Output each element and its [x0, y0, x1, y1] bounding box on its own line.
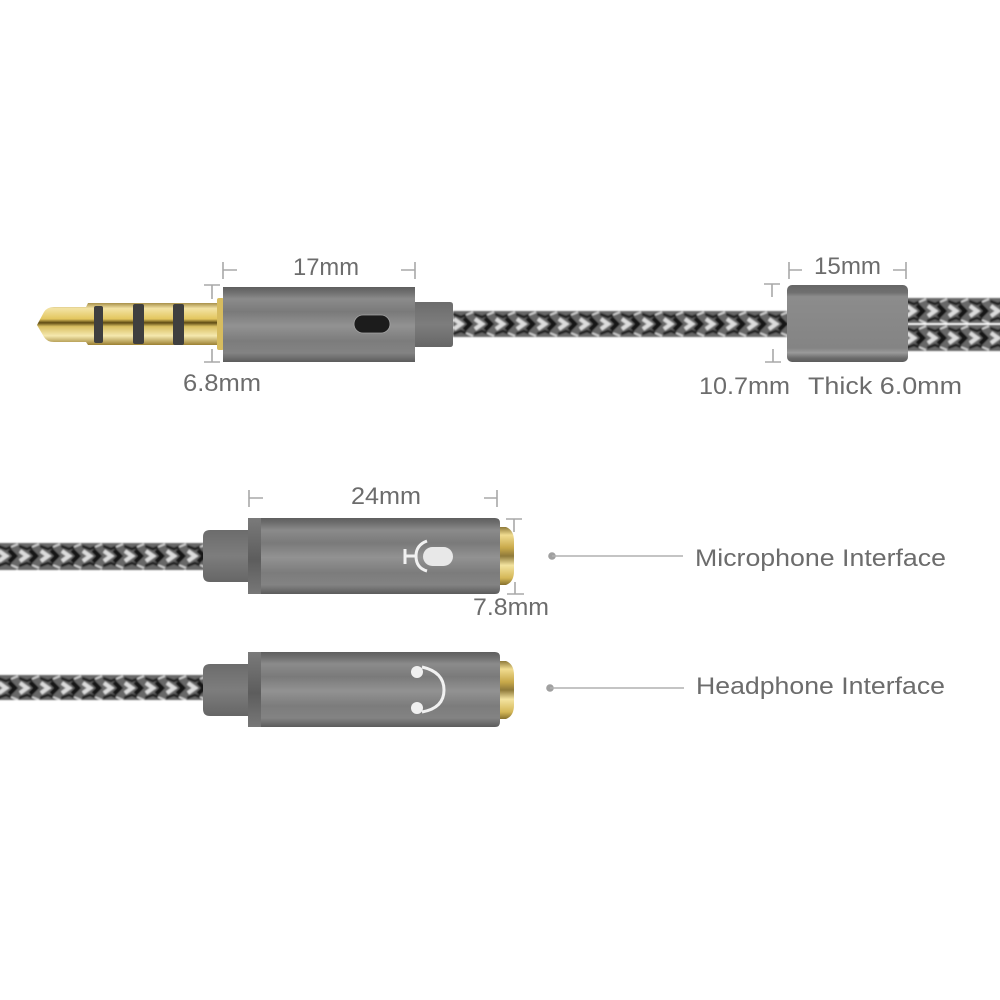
cable: upper right branch: [906, 298, 1000, 323]
microphone socket: [203, 518, 514, 594]
4-pole audio plug: [37, 287, 453, 362]
splitter block: [787, 285, 908, 362]
dimension marks: [204, 262, 906, 594]
socket body: [248, 518, 500, 594]
dimension: 7.8mm: 7.8mm: [473, 594, 549, 621]
headphone socket: [203, 652, 514, 727]
cable: main from plug to splitter: [453, 311, 789, 337]
dimension: 6.8mm: 6.8mm: [183, 370, 261, 397]
gold flange: [217, 298, 224, 350]
mic slot: [354, 315, 390, 333]
socket collar: [203, 530, 250, 582]
insulating rings: [94, 304, 184, 345]
dimension: 15mm: 15mm: [814, 253, 881, 280]
gold tip: [37, 303, 217, 345]
callout: headphone interface: Headphone Interface: [696, 673, 945, 700]
dimension: Thick 6.0mm: Thick 6.0mm: [808, 373, 962, 400]
icon: microphone: [405, 541, 453, 571]
cable: microphone branch: [0, 543, 206, 570]
gold rim: [498, 661, 514, 719]
icon: headphones: [411, 666, 444, 714]
callout: headphone interface: [546, 673, 945, 700]
gold rim: [498, 527, 514, 585]
dimension: 17mm: 17mm: [293, 254, 359, 281]
callout: microphone interface: [548, 545, 946, 572]
cable: headphone branch: [0, 675, 206, 700]
darker band: [248, 652, 261, 727]
plug collar: [415, 302, 453, 347]
callout: microphone interface: Microphone Interface: [695, 545, 946, 572]
cable: lower right branch: [906, 325, 1000, 351]
dimension: 10.7mm: 10.7mm: [699, 373, 790, 400]
socket collar: [203, 664, 250, 716]
dimension: 24mm: 24mm: [351, 483, 421, 510]
darker band: [248, 518, 261, 594]
socket body: [248, 652, 500, 727]
plug body: [223, 287, 415, 362]
